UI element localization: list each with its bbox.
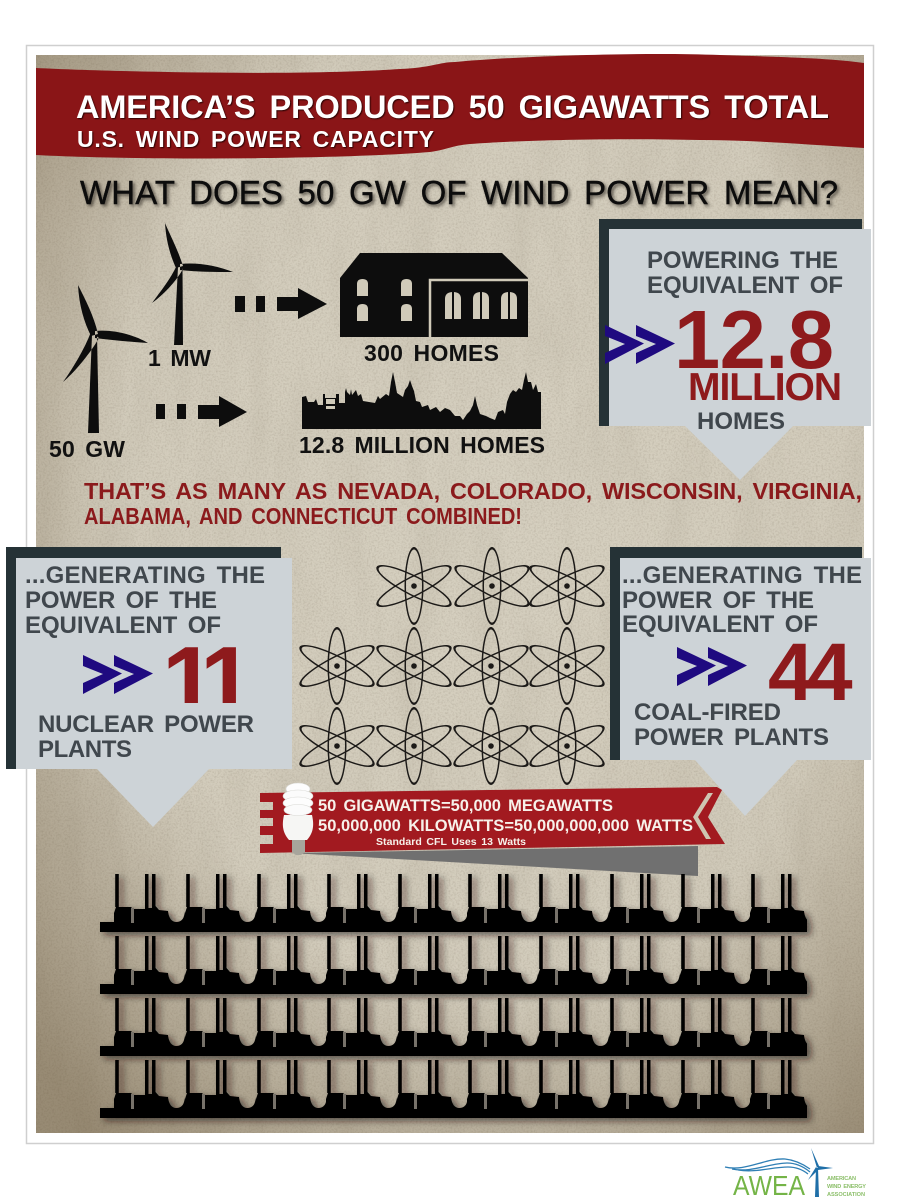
- icon: chevrons: [83, 655, 153, 694]
- label: 1 MW: 1 MW: [148, 345, 211, 371]
- nuclear lead text: POWER OF THE: [25, 587, 217, 614]
- logo: AWEA: AMERICAN: [827, 1176, 856, 1182]
- row 2 of plants: [100, 936, 821, 994]
- nuclear label: PLANTS: [38, 736, 132, 763]
- number: 44: 44: [768, 627, 853, 718]
- callout lead text: EQUIVALENT OF: [647, 272, 843, 299]
- nuclear label: NUCLEAR POWER: [38, 711, 254, 738]
- wind to homes comparison: [49, 223, 545, 462]
- title text: AMERICA’S PRODUCED 50 GIGAWATTS TOTAL: [76, 89, 829, 125]
- logo: AWEA: [725, 1148, 866, 1200]
- coal lead text: EQUIVALENT OF: [622, 611, 818, 638]
- ribbon text: 50,000,000 KILOWATTS=50,000,000,000 WATTS: [318, 817, 693, 835]
- statement text: [84, 478, 862, 529]
- icon: small wind turbine: [152, 223, 233, 345]
- coal lead text: POWER OF THE: [622, 587, 814, 614]
- ribbon text: Standard CFL Uses 13 Watts: [376, 836, 526, 848]
- subtitle text: U.S. WIND POWER CAPACITY: [77, 126, 434, 152]
- logo: AWEA: ASSOCIATION: [827, 1192, 865, 1198]
- number unit: million: MILLION: [688, 366, 842, 409]
- nuclear lead text: [25, 562, 265, 639]
- statement text: ALABAMA, AND CONNECTICUT COMBINED!: [84, 503, 522, 529]
- coal label: COAL-FIRED: [634, 699, 781, 726]
- arrow: turbine to skyline: [156, 396, 247, 427]
- statement text: THAT’S AS MANY AS NEVADA, COLORADO, WISCONSIN, VIRGINIA,: [84, 478, 862, 504]
- panel: nuclear callout: [6, 547, 292, 827]
- title banner: [36, 54, 864, 158]
- label: 300 homes: 300 HOMES: [364, 340, 499, 366]
- icon: large wind turbine: [63, 285, 148, 433]
- coal label: POWER PLANTS: [634, 724, 829, 751]
- icon: CFL bulb: [283, 783, 313, 855]
- panel: coal callout: [610, 547, 871, 816]
- icon grid: eleven atoms: [295, 547, 609, 785]
- nuclear label: [38, 711, 254, 763]
- logo: AWEA: WIND ENERGY: [827, 1184, 866, 1190]
- row 3 of plants: [100, 998, 821, 1056]
- nuclear lead text: ...GENERATING THE: [25, 562, 265, 589]
- label: 50 GW: 50 GW: [49, 436, 125, 462]
- ribbon text: 50 GIGAWATTS=50,000 MEGAWATTS: [318, 797, 613, 815]
- icon grid: forty-four coal plants: [100, 874, 821, 1118]
- main question heading: WHAT DOES 50 GW OF WIND POWER MEAN?: [80, 174, 838, 211]
- conversion ribbon: [260, 783, 725, 876]
- callout unit: homes: HOMES: [697, 408, 785, 435]
- callout lead text: POWERING THE: [647, 247, 838, 274]
- row 1 of plants: [100, 874, 821, 932]
- icon: city skyline: [302, 372, 541, 429]
- callout lead text: [647, 247, 843, 299]
- coal label: [634, 699, 829, 751]
- icon: chevrons: [677, 647, 747, 686]
- ribbon text: [318, 797, 693, 848]
- coal lead text: ...GENERATING THE: [622, 562, 862, 589]
- coal lead text: [622, 562, 862, 638]
- icon: chevrons: [605, 325, 675, 364]
- label: 12.8 million homes: 12.8 MILLION HOMES: [299, 432, 545, 458]
- row 4 of plants: [100, 1060, 821, 1118]
- panel: homes callout: [599, 219, 871, 480]
- icon: house: [340, 253, 528, 337]
- nuclear lead text: EQUIVALENT OF: [25, 612, 221, 639]
- number: 12.8: 12.8: [674, 293, 834, 386]
- arrow: turbine to house: [235, 288, 327, 319]
- number: 11: 11: [162, 626, 254, 736]
